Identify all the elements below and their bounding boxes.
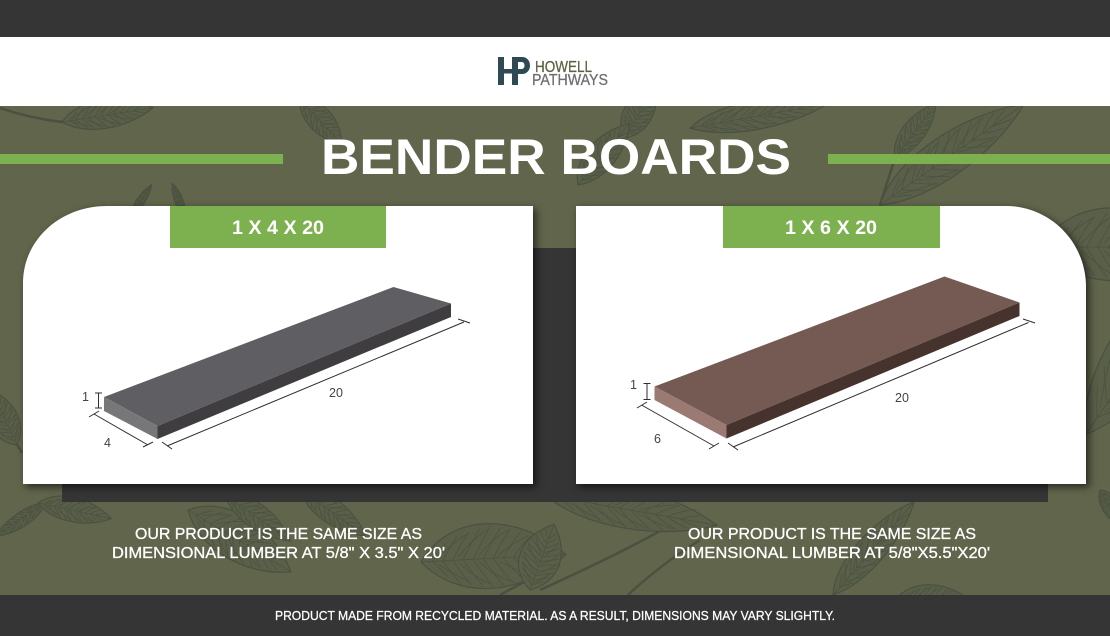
right green title rule bbox=[828, 154, 1110, 164]
title: BENDER BOARDS bbox=[321, 129, 791, 185]
footer bar bbox=[0, 595, 1110, 636]
size tab: 1 X 4 X 20 bbox=[232, 218, 324, 239]
dimension lines: 1 bbox=[630, 378, 637, 392]
left size note bbox=[112, 526, 445, 562]
panel: 1 x 4 x 20 board bbox=[23, 206, 533, 484]
right size note: OUR PRODUCT IS THE SAME SIZE AS bbox=[688, 526, 976, 543]
dimension lines bbox=[630, 319, 1035, 450]
dimension lines bbox=[82, 319, 470, 450]
left green title rule bbox=[0, 154, 283, 164]
dimension lines: 1 bbox=[82, 390, 89, 404]
dimension lines: 20 bbox=[895, 391, 909, 405]
right size note bbox=[674, 526, 990, 562]
size tab bbox=[723, 206, 940, 248]
logo: Howell Pathways: HOWELL bbox=[535, 59, 592, 76]
logo: Howell Pathways bbox=[498, 57, 608, 89]
dark backing panel bbox=[62, 248, 1048, 502]
gray board illustration bbox=[104, 287, 451, 439]
dimension lines: 6 bbox=[654, 432, 661, 446]
panel: 1 x 6 x 20 board bbox=[576, 206, 1086, 484]
white header band bbox=[0, 37, 1110, 106]
size tab: 1 X 6 X 20 bbox=[785, 218, 877, 239]
left size note: OUR PRODUCT IS THE SAME SIZE AS bbox=[135, 526, 422, 543]
olive background panel bbox=[0, 105, 1110, 596]
dimension lines: 4 bbox=[104, 436, 111, 450]
card bbox=[23, 206, 533, 484]
left size note: DIMENSIONAL LUMBER AT 5/8" X 3.5" X 20' bbox=[112, 545, 445, 562]
card bbox=[576, 206, 1086, 484]
logo: Howell Pathways: PATHWAYS bbox=[532, 72, 608, 89]
top dark bar bbox=[0, 0, 1110, 37]
size tab bbox=[170, 206, 386, 248]
right size note: DIMENSIONAL LUMBER AT 5/8"X5.5"X20' bbox=[674, 545, 990, 562]
dimension lines: 20 bbox=[329, 386, 343, 400]
brown board illustration bbox=[654, 276, 1020, 438]
footer bar: PRODUCT MADE FROM RECYCLED MATERIAL. AS A RESULT, DIMENSIONS MAY VARY SLIGHTLY. bbox=[275, 609, 835, 623]
